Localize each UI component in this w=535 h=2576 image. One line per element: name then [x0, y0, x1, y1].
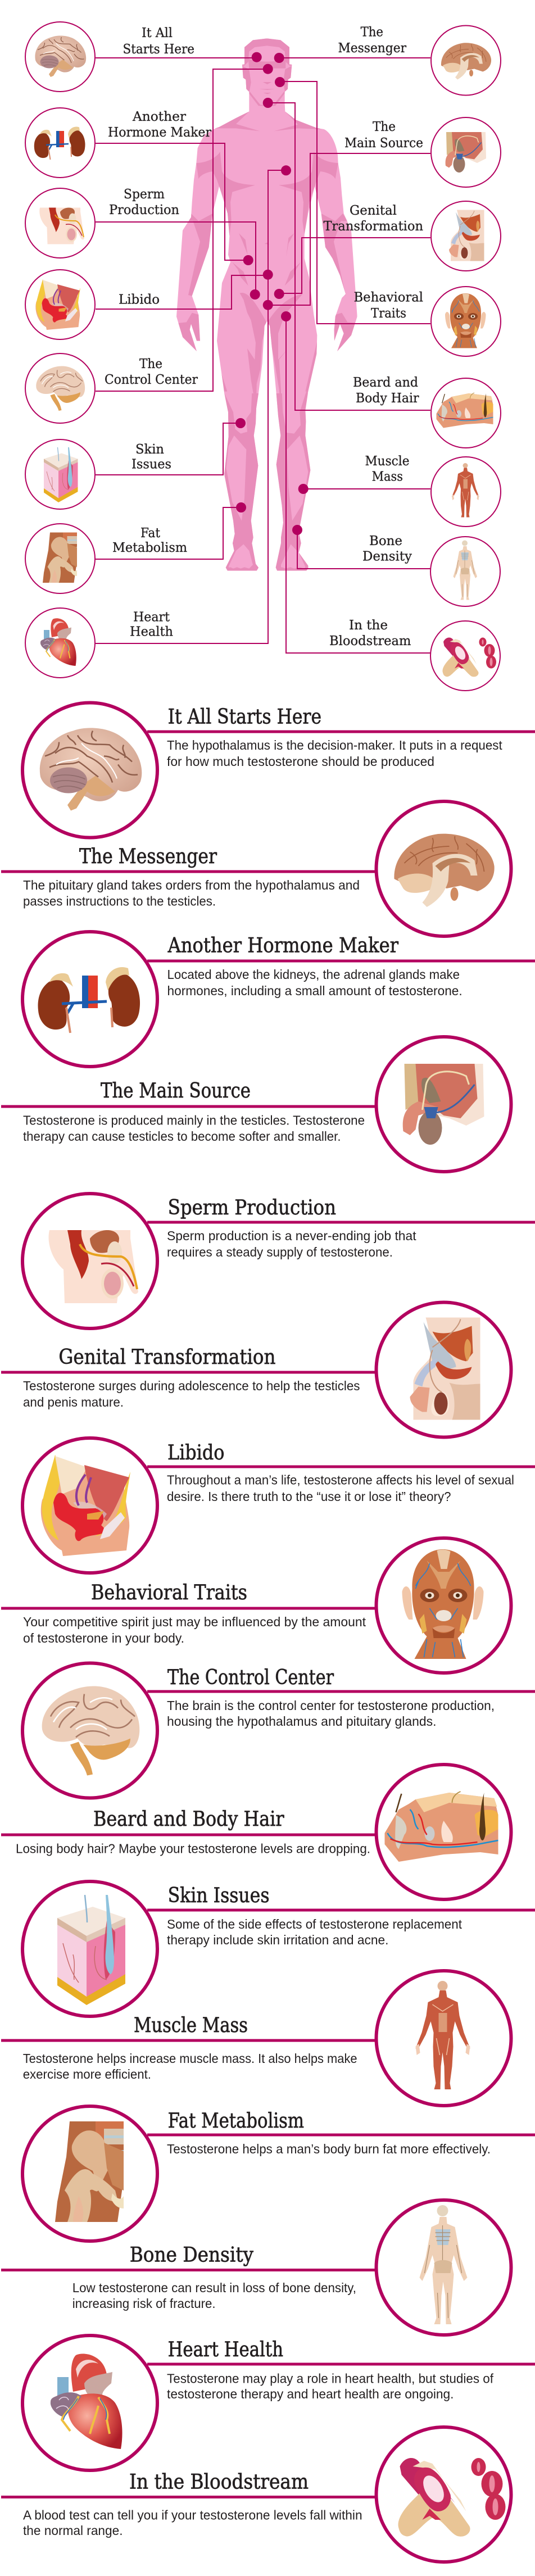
- section: Sperm Production: Sperm Production: [168, 1196, 336, 1219]
- callout: The Control Center: [25, 353, 198, 423]
- section: It All Starts Here: for how much testosterone should be produced: [167, 754, 434, 769]
- callout: Another Hormone Maker: Another: [132, 108, 187, 124]
- section: It All Starts Here: It All Starts Here: [168, 705, 321, 728]
- section: Fat Metabolism: Testosterone helps a man’s body burn fat more effectively.: [167, 2142, 491, 2156]
- section: Heart Health: Testosterone may play a role in heart health, but studies of: [167, 2371, 494, 2386]
- section: Beard and Body Hair: Beard and Body Hair: [93, 1808, 284, 1831]
- callout: In the Bloodstream: Bloodstream: [329, 633, 411, 648]
- section: Muscle Mass: Muscle Mass: [134, 2014, 248, 2037]
- section: Skin Issues: therapy include skin irritation and acne.: [167, 1933, 389, 1947]
- section: The Control Center: The Control Center: [167, 1666, 334, 1689]
- section: Behavioral Traits: Your competitive spirit just may be influenced by the amount: [23, 1614, 366, 1629]
- callout: It All Starts Here: [25, 22, 194, 92]
- section: Fat Metabolism: [22, 2106, 535, 2241]
- callout: Genital Transformation: Genital: [350, 202, 397, 218]
- callout: Beard and Body Hair: Beard and: [353, 374, 418, 390]
- section: Libido: desire. Is there truth to the “use it or lose it” theory?: [167, 1489, 451, 1504]
- callout: Muscle Mass: Mass: [372, 469, 403, 484]
- callout: The Control Center: Control Center: [105, 371, 198, 387]
- section: Sperm Production: Sperm production is a never-ending job that: [167, 1228, 416, 1243]
- callout: The Main Source: The: [373, 119, 396, 134]
- section: The Messenger: The pituitary gland takes orders from the hypothalamus and: [23, 878, 360, 892]
- section: Muscle Mass: Testosterone helps increase muscle mass. It also helps make: [23, 2051, 357, 2066]
- callout: Sperm Production: Production: [109, 202, 179, 217]
- callout: Libido: Libido: [119, 291, 160, 307]
- callout: Behavioral Traits: Behavioral: [354, 289, 423, 305]
- body diagram: [25, 22, 501, 691]
- callout: Behavioral Traits: Traits: [371, 305, 406, 321]
- section: The Main Source: [1, 1037, 511, 1172]
- section: Genital Transformation: and penis mature.: [23, 1395, 124, 1409]
- section: The Main Source: therapy can cause testicles to become softer and smaller.: [23, 1129, 341, 1144]
- callout: It All Starts Here: It All: [142, 25, 173, 40]
- section: Skin Issues: [22, 1881, 535, 2016]
- section: The Main Source: The Main Source: [101, 1080, 251, 1103]
- section: Sperm Production: requires a steady supply of testosterone.: [167, 1245, 393, 1259]
- callout: Sperm Production: Sperm: [124, 186, 165, 202]
- callout: Skin Issues: [25, 439, 171, 509]
- section: The Control Center: housing the hypothalamus and pituitary glands.: [167, 1714, 436, 1729]
- callout: Another Hormone Maker: Hormone Maker: [108, 124, 212, 140]
- callout: Muscle Mass: [365, 453, 501, 527]
- callout: Heart Health: Health: [130, 624, 173, 640]
- callout: Fat Metabolism: Fat: [140, 525, 161, 541]
- callout: Another Hormone Maker: [25, 108, 212, 178]
- section: In the Bloodstream: the normal range.: [23, 2523, 123, 2538]
- section: It All Starts Here: The hypothalamus is the decision-maker. It puts in a request: [167, 738, 502, 752]
- section: Genital Transformation: [1, 1303, 511, 1437]
- section: Fat Metabolism: Fat Metabolism: [168, 2110, 304, 2133]
- section: Sperm Production: [22, 1194, 535, 1328]
- callout: The Main Source: Main Source: [344, 135, 423, 151]
- section: In the Bloodstream: In the Bloodstream: [129, 2471, 309, 2494]
- callout: Skin Issues: Skin: [135, 441, 164, 457]
- section: Heart Health: [22, 2335, 535, 2470]
- callout: Beard and Body Hair: Body Hair: [356, 390, 419, 406]
- section: Heart Health: Heart Health: [168, 2338, 283, 2361]
- section: Muscle Mass: [1, 1971, 511, 2106]
- callout: Heart Health: Heart: [133, 609, 170, 625]
- section: Beard and Body Hair: [1, 1765, 511, 1899]
- callout: Bone Density: Density: [362, 548, 412, 564]
- section: The Messenger: The Messenger: [79, 845, 217, 868]
- section: Another Hormone Maker: Located above the kidneys, the adrenal glands make: [167, 967, 460, 982]
- section: Behavioral Traits: of testosterone in your body.: [23, 1631, 184, 1645]
- connector lines: [96, 58, 430, 653]
- human body silhouette: [176, 38, 357, 571]
- section: The Messenger: [1, 801, 511, 936]
- callout: Genital Transformation: Transformation: [324, 218, 423, 234]
- section: Heart Health: testosterone therapy and heart health are ongoing.: [167, 2387, 454, 2401]
- callout: The Control Center: The: [139, 356, 162, 371]
- section: The Control Center: The brain is the control center for testosterone production,: [167, 1698, 495, 1713]
- callout: Libido: [25, 270, 160, 339]
- callout: Muscle Mass: Muscle: [365, 453, 409, 469]
- callout: Bone Density: [362, 533, 500, 606]
- section: Libido: Throughout a man’s life, testosterone affects his level of sexual: [167, 1473, 514, 1487]
- callout: Skin Issues: Issues: [132, 456, 171, 472]
- callout: Fat Metabolism: [25, 524, 187, 593]
- callout: Behavioral Traits: [354, 287, 501, 356]
- callout: In the Bloodstream: In the: [349, 617, 388, 633]
- callout: Genital Transformation: [324, 201, 501, 271]
- section: Bone Density: increasing risk of fracture.: [72, 2296, 216, 2311]
- section: Bone Density: [1, 2200, 511, 2335]
- section: Libido: Libido: [167, 1441, 224, 1464]
- callout: Fat Metabolism: Metabolism: [112, 539, 187, 555]
- section: Another Hormone Maker: hormones, including a small amount of testosterone.: [167, 983, 463, 998]
- section: The Control Center: [22, 1663, 535, 1798]
- section: In the Bloodstream: [1, 2427, 511, 2562]
- callout: The Messenger: Messenger: [338, 40, 407, 56]
- section: Libido: [22, 1438, 535, 1573]
- callout: The Messenger: [338, 24, 501, 96]
- callout: In the Bloodstream: [329, 617, 500, 691]
- section: Bone Density: Bone Density: [130, 2244, 254, 2267]
- connector dots: [235, 52, 309, 535]
- section: Skin Issues: Skin Issues: [168, 1884, 270, 1907]
- section: It All Starts Here: [22, 702, 535, 837]
- section: The Main Source: Testosterone is produced mainly in the testicles. Testosterone: [23, 1113, 365, 1127]
- section: Behavioral Traits: [1, 1538, 511, 1673]
- section: Another Hormone Maker: [22, 932, 535, 1067]
- callout: The Main Source: [344, 117, 501, 187]
- callout: Heart Health: [25, 608, 173, 678]
- callout: Bone Density: Bone: [369, 533, 402, 548]
- callout: It All Starts Here: Starts Here: [123, 41, 194, 57]
- callout: Sperm Production: [25, 186, 179, 258]
- section: Bone Density: Low testosterone can result in loss of bone density,: [72, 2280, 356, 2295]
- section: In the Bloodstream: A blood test can tell you if your testosterone levels fall within: [23, 2507, 362, 2522]
- section: Genital Transformation: Testosterone surges during adolescence to help the testicles: [23, 1378, 360, 1393]
- section: Another Hormone Maker: Another Hormone Maker: [167, 935, 399, 958]
- section: Beard and Body Hair: Losing body hair? Maybe your testosterone levels are dropping.: [16, 1841, 370, 1856]
- callout: Beard and Body Hair: [353, 374, 501, 448]
- section: Behavioral Traits: Behavioral Traits: [91, 1581, 247, 1604]
- section: Muscle Mass: exercise more efficient.: [23, 2067, 151, 2081]
- section: The Messenger: passes instructions to the testicles.: [23, 894, 216, 909]
- callout: The Messenger: The: [361, 24, 383, 39]
- section: Skin Issues: Some of the side effects of testosterone replacement: [167, 1917, 463, 1931]
- section: Genital Transformation: Genital Transformation: [58, 1346, 276, 1369]
